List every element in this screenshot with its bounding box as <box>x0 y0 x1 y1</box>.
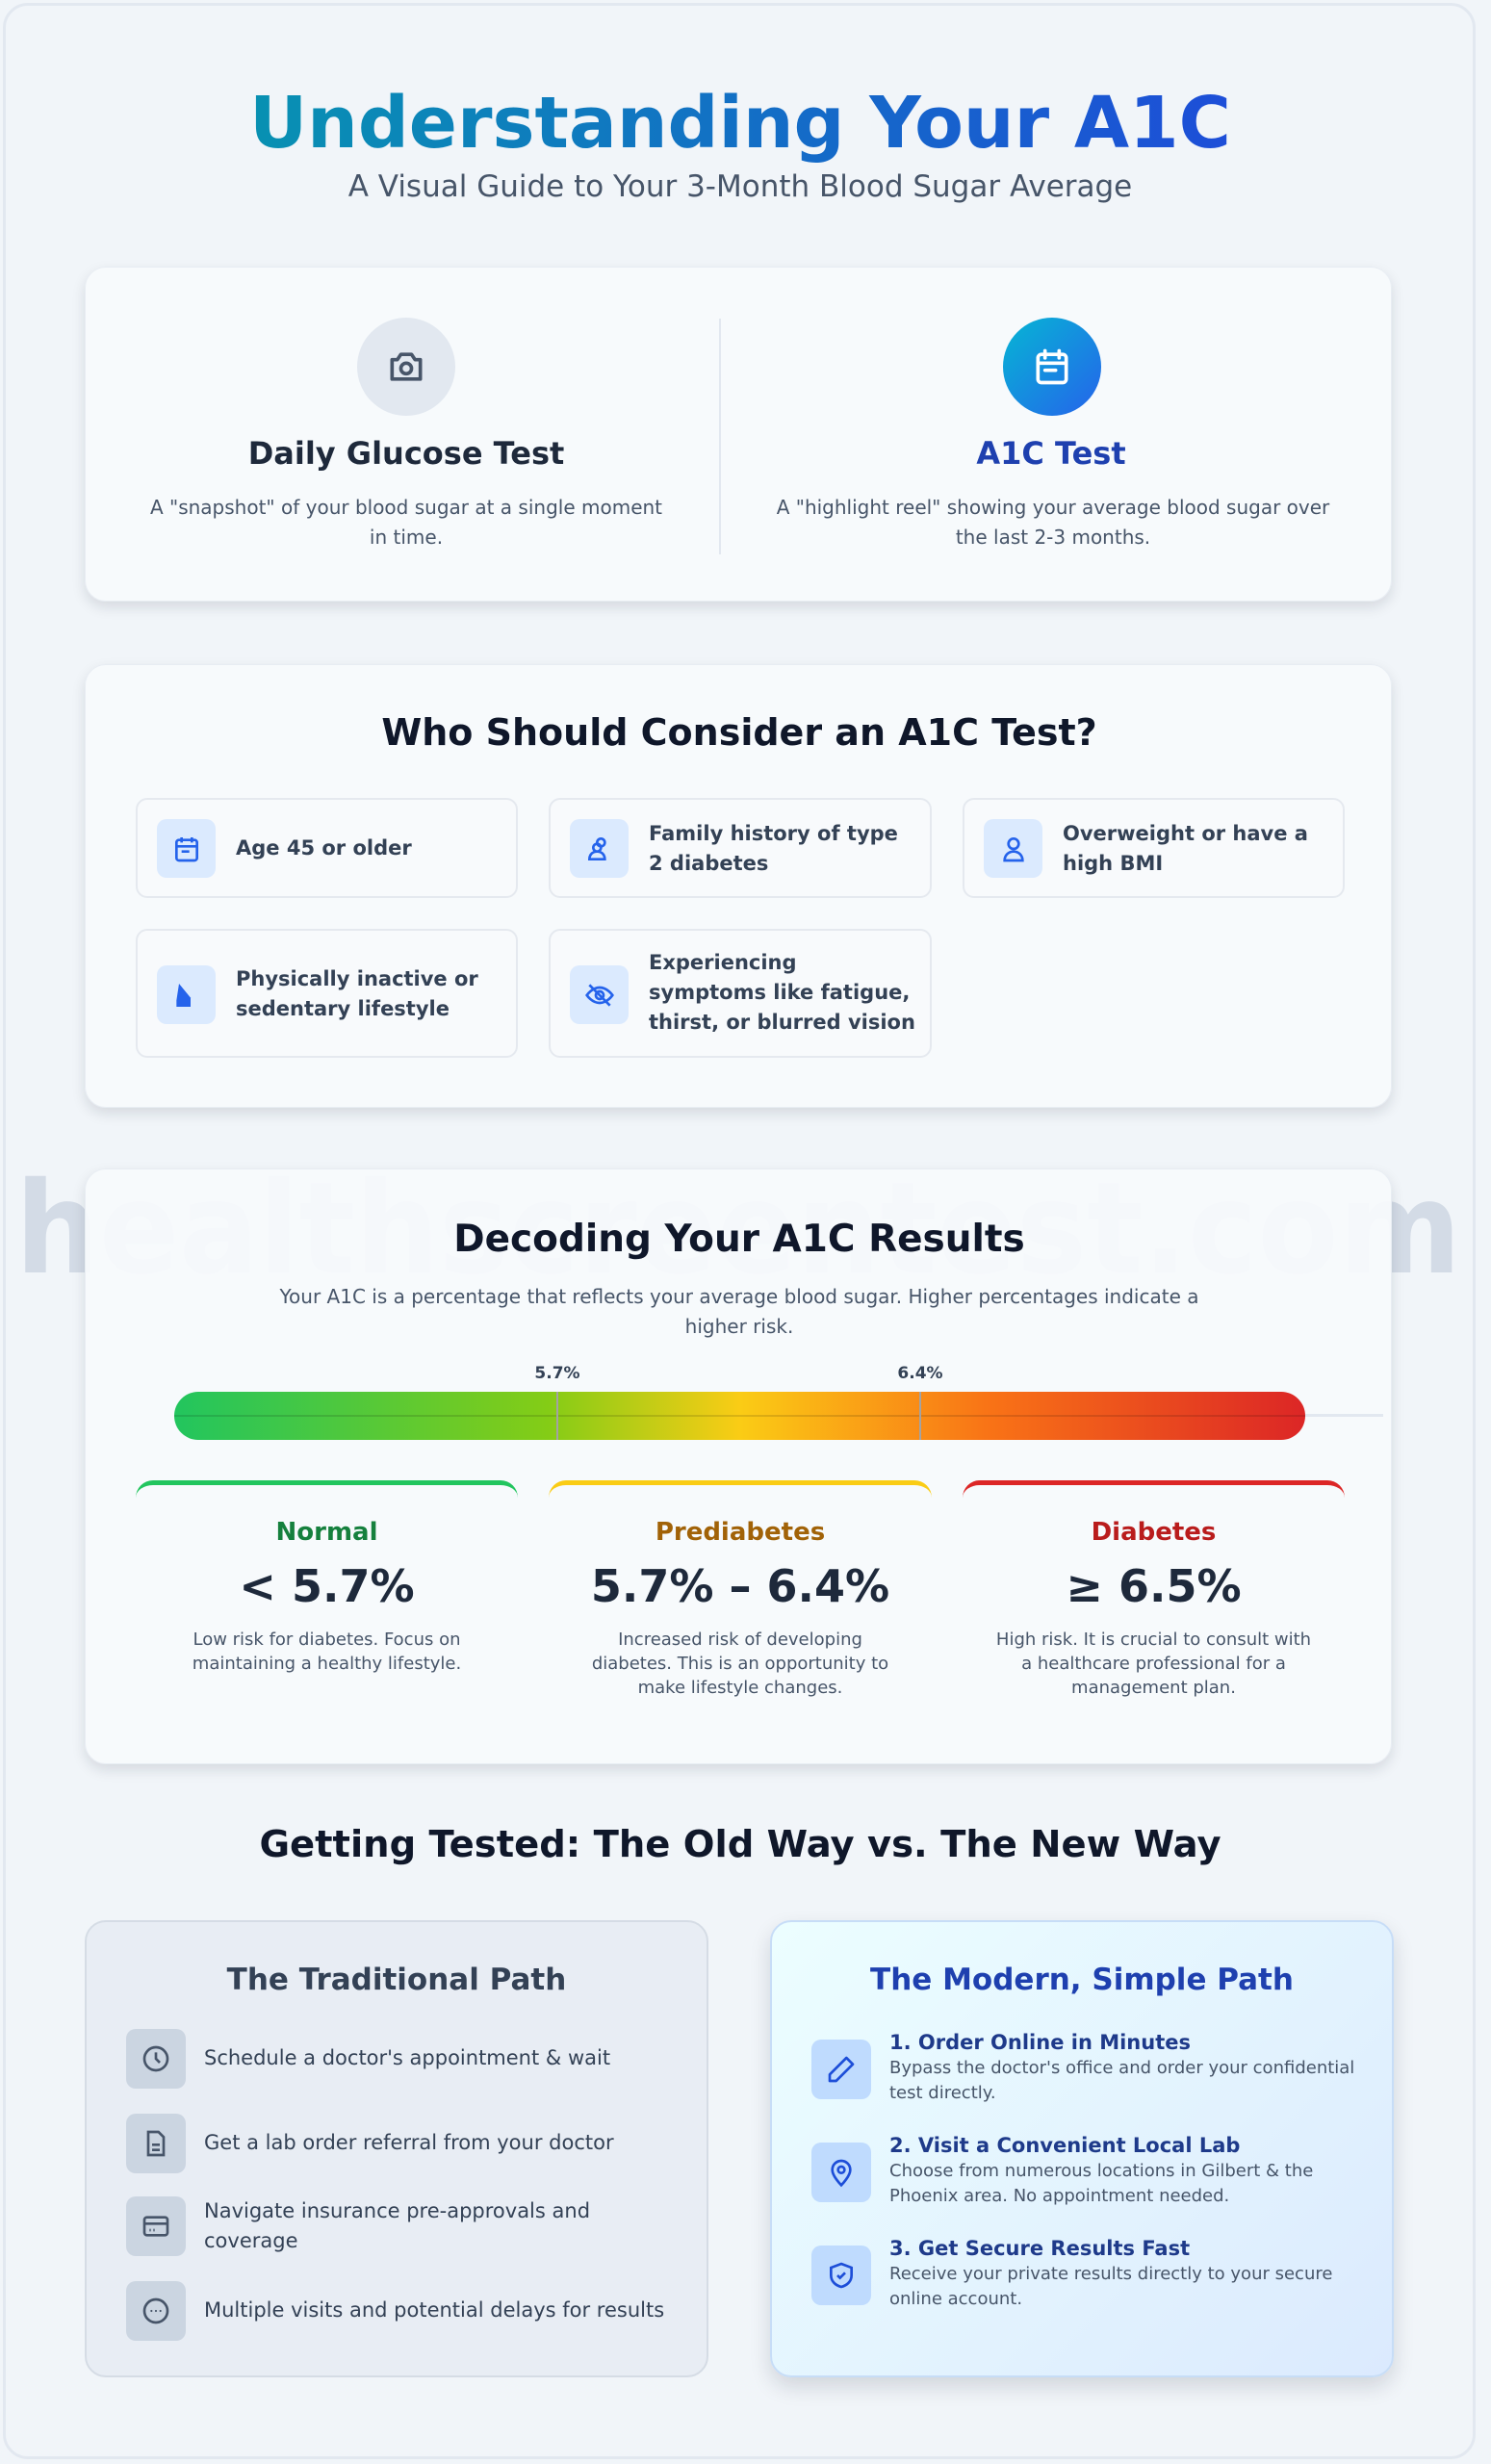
item: order online: Bypass the doctor's office and order your confidential test directly. <box>889 2058 1354 2103</box>
item: results: Receive your private results directly to your secure online account. <box>889 2264 1332 2309</box>
item: symptoms <box>549 929 932 1058</box>
heading: Decoding Your A1C Results <box>453 1218 1025 1261</box>
card: normal <box>136 1480 518 1711</box>
item: age <box>136 798 518 898</box>
heading: daily glucose: Daily Glucose Test <box>248 435 564 472</box>
chart: gradient bar: 6.4% <box>897 1364 943 1383</box>
title: Understanding Your A1C <box>249 82 1231 165</box>
item: delays <box>126 2281 664 2341</box>
item: inactive: Physically inactive or sedentary lifestyle <box>236 967 478 1020</box>
heading: old vs new: Getting Tested: The Old Way vs. The New Way <box>259 1823 1221 1866</box>
heading: Who Should Consider an A1C Test? <box>381 711 1097 754</box>
panel: traditional path <box>85 1920 708 2377</box>
item: local lab <box>811 2134 1313 2206</box>
item: family: Family history of type 2 diabetes <box>649 822 898 875</box>
panel: who should test <box>85 664 1392 1108</box>
heading: A1C test: A1C Test <box>976 435 1126 472</box>
item: order online <box>811 2031 1354 2103</box>
chart: gradient bar: 5.7% <box>534 1364 580 1383</box>
item: symptoms: Experiencing symptoms like fatigue, thirst, or blurred vision <box>649 951 915 1034</box>
card: diabetes <box>963 1480 1345 1711</box>
item: schedule: Schedule a doctor's appointment & wait <box>204 2046 610 2069</box>
item: delays: Multiple visits and potential delays for results <box>204 2298 664 2322</box>
item: overweight: Overweight or have a high BMI <box>1063 822 1308 875</box>
icon: camera <box>357 318 455 416</box>
text: intro: Your A1C is a percentage that reflects your average blood sugar. Higher percentages indicate a higher risk. <box>279 1285 1199 1338</box>
panel: decoding results <box>85 1168 1392 1764</box>
item: referral: Get a lab order referral from your doctor <box>204 2131 614 2154</box>
card: normal: Low risk for diabetes. Focus on maintaining a healthy lifestyle. <box>193 1630 461 1674</box>
item: inactive <box>136 929 518 1058</box>
item: referral <box>126 2114 614 2173</box>
item: age: Age 45 or older <box>236 836 412 860</box>
item: overweight <box>963 798 1345 898</box>
heading: The Modern, Simple Path <box>870 1963 1294 1997</box>
item: insurance: Navigate insurance pre-approvals and coverage <box>204 2199 590 2252</box>
card: normal: Normal <box>275 1518 377 1547</box>
icon: calendar <box>1003 318 1101 416</box>
chart: gradient bar <box>174 1364 1383 1440</box>
card: prediabetes: Prediabetes <box>656 1518 825 1547</box>
panel: modern path <box>770 1920 1394 2377</box>
card: prediabetes <box>549 1480 932 1711</box>
item: results: 3. Get Secure Results Fast <box>889 2237 1190 2260</box>
card: prediabetes: 5.7% – 6.4% <box>591 1560 889 1612</box>
item: family <box>549 798 932 898</box>
card: prediabetes: Increased risk of developing diabetes. This is an opportunity to make lifestyle changes. <box>592 1630 888 1698</box>
card: normal: < 5.7% <box>239 1560 415 1612</box>
subtitle: A Visual Guide to Your 3-Month Blood Sugar Average <box>348 169 1132 204</box>
item: schedule <box>126 2029 610 2089</box>
heading: The Traditional Path <box>227 1963 566 1997</box>
card: diabetes: Diabetes <box>1092 1518 1216 1547</box>
card: diabetes: High risk. It is crucial to consult with a healthcare professional for a management plan. <box>996 1630 1311 1698</box>
card: diabetes: ≥ 6.5% <box>1066 1560 1242 1612</box>
text: A1C desc: A "highlight reel" showing your average blood sugar over the last 2-3 months. <box>777 496 1329 549</box>
item: order online: 1. Order Online in Minutes <box>889 2031 1191 2054</box>
item: local lab: Choose from numerous locations in Gilbert & the Phoenix area. No appointment needed. <box>889 2161 1313 2206</box>
panel: comparison <box>85 267 1392 602</box>
text: daily glucose desc: A "snapshot" of your blood sugar at a single moment in time. <box>150 496 662 549</box>
item: results <box>811 2237 1332 2309</box>
item: local lab: 2. Visit a Convenient Local Lab <box>889 2134 1240 2157</box>
